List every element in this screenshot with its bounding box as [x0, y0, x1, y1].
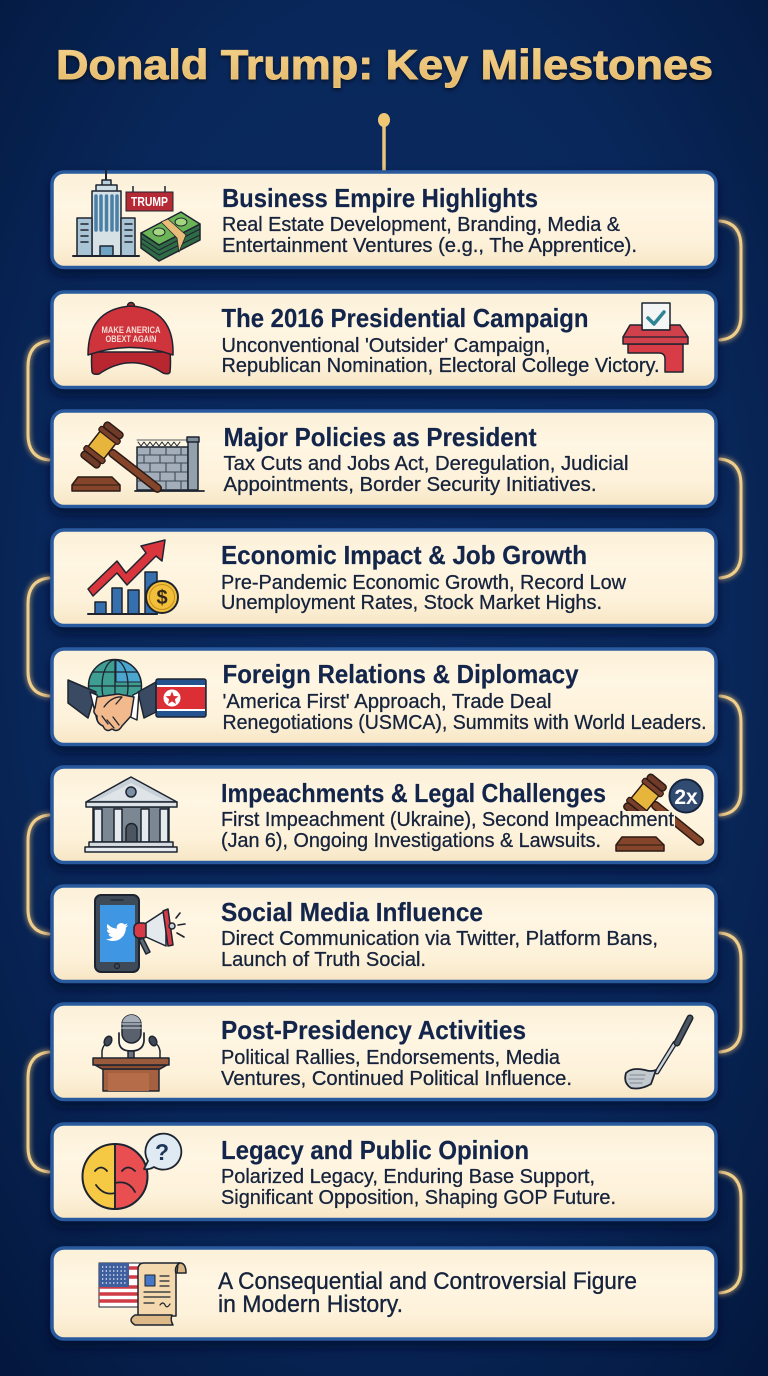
icon: north korean flag: [156, 679, 206, 717]
body text: Appointments, Border Security Initiatives.: [224, 473, 596, 496]
body text: Pre-Pandemic Economic Growth, Record Low: [221, 571, 626, 594]
icon: gavel with 2x badge: [612, 772, 716, 861]
timeline start pin: [378, 113, 390, 172]
body text: Real Estate Development, Branding, Media &: [222, 213, 620, 236]
body text: 'America First' Approach, Trade Deal: [222, 690, 552, 713]
panel: economic impact: [50, 530, 718, 634]
icon: golf club: [625, 1018, 690, 1088]
body text: [222, 213, 637, 257]
icon: question speech bubble: [144, 1134, 181, 1170]
heading: Economic Impact & Job Growth: [221, 540, 587, 570]
icon: phone with bird logo: [95, 895, 139, 972]
body text: Ventures, Continued Political Influence.: [221, 1067, 572, 1090]
panel: post-presidency: [50, 1004, 718, 1108]
heading: Social Media Influence: [221, 897, 483, 927]
icon: bar chart with arrow and coin: [88, 540, 178, 614]
body text: Significant Opposition, Shaping GOP Future.: [221, 1186, 616, 1209]
icon: stack of money: [141, 212, 200, 261]
icon: question speech bubble: ?: [155, 1139, 169, 1165]
icon: courthouse: [85, 777, 177, 852]
panel: impeachments: [50, 767, 718, 871]
heading: Major Policies as President: [224, 422, 537, 452]
body text: Unconventional 'Outsider' Campaign,: [222, 334, 550, 357]
body text: Republican Nomination, Electoral College Victory.: [222, 354, 660, 377]
body text: Unemployment Rates, Stock Market Highs.: [221, 591, 602, 614]
heading: Post-Presidency Activities: [221, 1015, 526, 1045]
closing statement: in Modern History.: [218, 1291, 403, 1318]
heading: Legacy and Public Opinion: [221, 1135, 529, 1165]
body text: Political Rallies, Endorsements, Media: [221, 1046, 561, 1069]
body text: Tax Cuts and Jobs Act, Deregulation, Judicial: [224, 452, 628, 475]
body text: Entertainment Ventures (e.g., The Apprentice).: [222, 234, 637, 257]
icon: megaphone: [134, 909, 185, 954]
body text: Launch of Truth Social.: [221, 948, 426, 971]
panel: conclusion: [50, 1248, 718, 1348]
panel: business empire: [50, 170, 718, 276]
body text: [221, 1046, 572, 1090]
icon: podium with microphones: [93, 1015, 169, 1091]
body text: [222, 334, 660, 377]
body text: Direct Communication via Twitter, Platform Bans,: [221, 927, 658, 950]
heading: Impeachments & Legal Challenges: [221, 778, 606, 808]
body text: [221, 1165, 616, 1209]
icon: trump sign: [126, 186, 173, 211]
heading: Foreign Relations & Diplomacy: [222, 659, 579, 689]
heading: Business Empire Highlights: [222, 183, 538, 213]
title: Donald Trump: Key Milestones: [56, 41, 713, 88]
closing statement: A Consequential and Controversial Figure: [218, 1268, 637, 1295]
body text: (Jan 6), Ongoing Investigations & Lawsuits.: [221, 829, 601, 852]
icon: bar chart with arrow and coin: $: [156, 587, 168, 609]
body text: Polarized Legacy, Enduring Base Support,: [221, 1165, 595, 1188]
icon: ballot box: [623, 303, 688, 372]
icon: handshake: [68, 680, 156, 730]
icon: two-sided face: [82, 1144, 148, 1209]
connectors between cards: [28, 221, 741, 1293]
panel: major policies: [50, 411, 718, 515]
icon: american flag: [99, 1263, 141, 1307]
body text: Renegotiations (USMCA), Summits with World Leaders.: [222, 711, 706, 734]
icon: scroll document: [131, 1263, 186, 1325]
body text: [222, 690, 706, 734]
panel: 2016 campaign: [50, 292, 718, 396]
icon: globe: [88, 660, 142, 712]
icon: gavel with 2x badge: 2x: [674, 786, 698, 809]
panel: legacy: [50, 1124, 718, 1228]
icon: red campaign hat: OBEXT AGAIN: [106, 334, 157, 345]
body text: [224, 452, 628, 496]
icon: border wall: [135, 437, 204, 491]
body text: [221, 927, 658, 971]
panel: social media: [50, 886, 718, 990]
body text: [221, 808, 674, 852]
heading: The 2016 Presidential Campaign: [222, 303, 588, 333]
icon: gavel: [72, 420, 174, 508]
closing statement: [218, 1268, 637, 1318]
icon: red campaign hat: MAKE ANERICA: [102, 325, 161, 336]
icon: skyscraper: [73, 170, 139, 256]
body text: First Impeachment (Ukraine), Second Impeachment: [221, 808, 674, 831]
panel: foreign relations: [50, 649, 718, 753]
icon: red campaign hat: [88, 302, 173, 374]
icon: trump sign: TRUMP: [131, 194, 168, 209]
body text: [221, 571, 626, 614]
